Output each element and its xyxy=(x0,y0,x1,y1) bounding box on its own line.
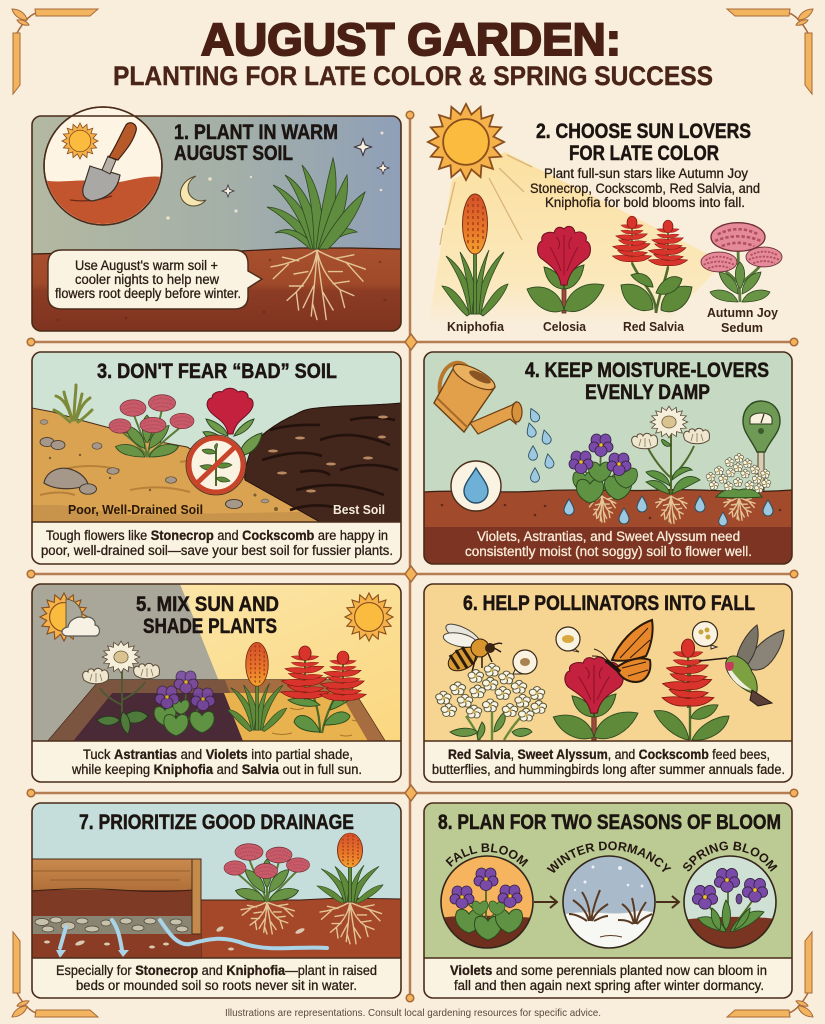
caption: while keeping Kniphofia and Salvia out in full sun. xyxy=(71,762,362,777)
flower: celosia xyxy=(527,226,604,334)
title xyxy=(113,14,713,91)
icon: trowel in warm soil circle xyxy=(44,107,162,226)
heading xyxy=(536,120,751,165)
icon: no-symbol over rich-soil plant xyxy=(186,435,246,495)
icon: full sun xyxy=(345,593,393,641)
flower: kniphofia xyxy=(442,194,508,334)
panel 8: plan for two seasons of bloom xyxy=(423,802,793,999)
panel 2: choose sun lovers xyxy=(428,104,782,335)
scene: sky, poor soil and rich soil xyxy=(32,352,401,522)
soil labels xyxy=(68,502,385,517)
plant: violets xyxy=(569,434,637,522)
heading xyxy=(136,593,279,638)
winter dormancy circle xyxy=(546,841,672,949)
plant: kniphofia with roots xyxy=(317,833,383,944)
arrow: winter to spring xyxy=(656,896,679,908)
heading: SHADE PLANTS xyxy=(143,615,277,638)
panel 4: keep moisture-lovers evenly damp xyxy=(424,352,792,564)
flower: celosia: Celosia xyxy=(543,319,587,334)
soil labels: Poor, Well-Drained Soil xyxy=(68,502,203,517)
scene: shade and sun split with raised bed xyxy=(32,584,401,744)
plant: sedum with roots xyxy=(224,844,310,934)
caption on soil xyxy=(465,529,752,559)
plant: sweet alyssum xyxy=(436,663,547,740)
corner ornament: bottom right xyxy=(727,932,813,1017)
spring bloom circle xyxy=(683,842,778,949)
heading xyxy=(174,121,338,165)
description xyxy=(530,166,760,210)
flower: autumn joy sedum: Autumn Joy xyxy=(707,305,779,320)
soil water drops xyxy=(564,496,773,526)
callout: cooler nights to help new xyxy=(75,272,219,287)
caption: poor, well-drained soil—save your best soil for fussier plants. xyxy=(41,543,393,558)
description: Kniphofia for bold blooms into fall. xyxy=(545,195,745,210)
icon: sun xyxy=(428,104,504,180)
caption: Tough flowers like Stonecrop and Cockscomb are happy in xyxy=(46,528,388,543)
caption xyxy=(32,958,401,998)
heading xyxy=(525,359,769,404)
flower: kniphofia: Kniphofia xyxy=(447,319,505,334)
sun beams xyxy=(428,152,724,326)
heading: 7. PRIORITIZE GOOD DRAINAGE xyxy=(79,811,354,834)
heading: FOR LATE COLOR xyxy=(569,142,719,165)
plant: astrantias in shade xyxy=(83,641,159,734)
description: Stonecrop, Cockscomb, Red Salvia, and xyxy=(530,181,760,196)
caption: Violets and some perennials planted now can bloom in xyxy=(450,963,767,978)
subtitle: PLANTING FOR LATE COLOR & SPRING SUCCESS xyxy=(113,61,713,91)
fall bloom circle: FALL BLOOM xyxy=(446,843,528,867)
corner ornament: bottom left xyxy=(12,932,98,1017)
caption xyxy=(32,741,401,782)
rocks xyxy=(40,420,269,509)
callout: Use August's warm soil + xyxy=(75,258,218,273)
panel 6: help pollinators into fall xyxy=(424,584,792,782)
flower: red salvia xyxy=(612,216,692,334)
caption: beds or mounded soil so roots never sit in water. xyxy=(76,978,357,993)
caption: butterflies, and hummingbirds long after summer annuals fade. xyxy=(432,762,785,777)
background xyxy=(424,803,792,958)
caption xyxy=(424,958,792,998)
plant: astrantias xyxy=(632,406,709,523)
flower: red salvia: Red Salvia xyxy=(623,319,685,334)
corner ornament: top left xyxy=(12,9,98,94)
plant: dry grass xyxy=(54,385,92,422)
corner ornament: top right xyxy=(727,9,813,94)
icon: water drop badge xyxy=(451,461,501,511)
scene: sky, ground, raised bed cross-section xyxy=(32,803,401,958)
panel 1: plant in warm August soil xyxy=(32,107,401,331)
heading: 3. DON'T FEAR “BAD” SOIL xyxy=(97,360,337,383)
icon: soil moisture meter xyxy=(743,401,780,490)
footer disclaimer: Illustrations are representations. Consult local gardening resources for specific advice. xyxy=(225,1007,601,1019)
flower: cockscomb in poor soil xyxy=(203,388,262,456)
heading: 1. PLANT IN WARM xyxy=(174,121,338,144)
caption: Especially for Stonecrop and Kniphofia—plant in raised xyxy=(56,963,377,978)
plant with roots xyxy=(267,158,365,320)
plant: sedum on poor soil xyxy=(109,395,194,457)
fall bloom circle xyxy=(440,843,534,949)
water drops falling xyxy=(525,407,555,482)
soil labels: Best Soil xyxy=(333,502,385,517)
winter dormancy circle: WINTER DORMANCY xyxy=(546,841,672,873)
flower: red salvia xyxy=(654,639,729,740)
icon: half sun behind cloud xyxy=(40,593,100,641)
panel 5: mix sun and shade plants xyxy=(32,584,401,782)
plant: kniphofia in sun xyxy=(227,642,287,731)
bubble: bee xyxy=(513,650,537,674)
heading: 4. KEEP MOISTURE-LOVERS xyxy=(525,359,769,382)
caption on soil: consistently moist (not soggy) soil to flower well. xyxy=(465,544,752,559)
icon: moon and stars xyxy=(180,139,389,206)
heading: 6. HELP POLLINATORS INTO FALL xyxy=(463,592,755,615)
plant: salvia in sun xyxy=(281,646,366,733)
bubble: butterfly xyxy=(556,627,580,652)
bubble: hummingbird xyxy=(692,622,718,649)
icon: hummingbird xyxy=(699,625,784,706)
flower: autumn joy sedum xyxy=(701,223,782,335)
plant: sweet alyssum xyxy=(706,453,771,520)
panel 3: don't fear bad soil xyxy=(32,352,401,564)
caption: Tuck Astrantias and Violets into partial shade, xyxy=(83,747,353,762)
heading: AUGUST SOIL xyxy=(174,142,293,165)
icon: bee xyxy=(442,620,502,676)
background xyxy=(424,584,792,741)
flower: autumn joy sedum: Sedum xyxy=(721,320,763,335)
caption: Red Salvia, Sweet Alyssum, and Cockscomb feed bees, xyxy=(448,747,770,762)
icon: monarch butterfly xyxy=(592,620,653,682)
arrow: fall to winter xyxy=(534,896,557,908)
caption xyxy=(424,741,792,782)
heading: EVENLY DAMP xyxy=(585,381,710,404)
caption xyxy=(32,522,401,564)
icon: watering can xyxy=(434,359,522,434)
callout xyxy=(48,250,262,309)
flower: cockscomb xyxy=(553,657,638,740)
caption on soil: Violets, Astrantias, and Sweet Alyssum need xyxy=(477,529,740,544)
heading: 5. MIX SUN AND xyxy=(136,593,279,616)
description: Plant full-sun stars like Autumn Joy xyxy=(544,166,748,181)
spring bloom circle: SPRING BLOOM xyxy=(683,842,778,872)
scene: dusk sky and soil xyxy=(32,116,401,331)
heading: 2. CHOOSE SUN LOVERS xyxy=(536,120,751,143)
callout: flowers root deeply before winter. xyxy=(55,286,241,301)
caption: fall and then again next spring after winter dormancy. xyxy=(454,978,764,993)
title: AUGUST GARDEN: xyxy=(201,14,621,65)
scene: sky and soil xyxy=(424,352,792,564)
plant: violets in shade xyxy=(154,671,215,736)
panel 7: prioritize good drainage xyxy=(32,803,401,998)
